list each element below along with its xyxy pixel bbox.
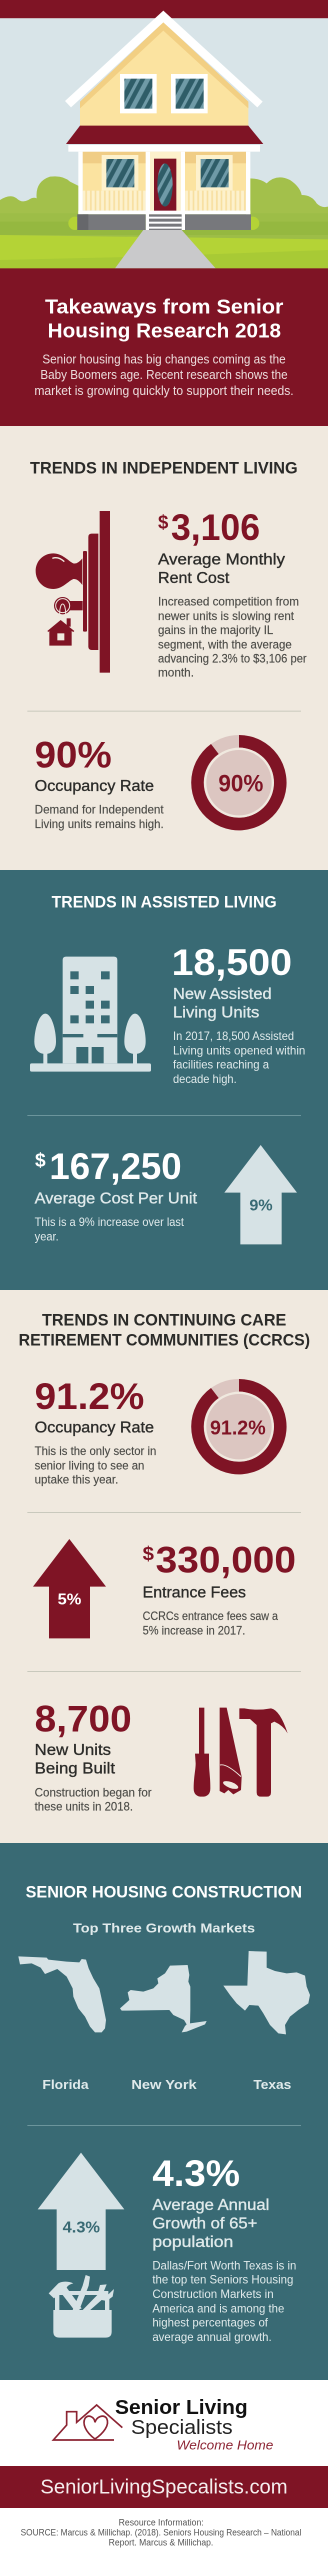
stat: new units being built: 8,700 xyxy=(35,1698,132,1740)
heading: TRENDS IN CONTINUING CARE xyxy=(42,1312,286,1330)
text: growth description: average annual growth. xyxy=(152,2331,272,2344)
text: sources: Resource Information: xyxy=(119,2518,204,2528)
heading: TRENDS IN INDEPENDENT LIVING xyxy=(30,459,298,477)
stat: occupancy: Demand for Independent xyxy=(35,804,164,817)
stat: CCRC occupancy xyxy=(35,1375,156,1486)
heading: TRENDS IN ASSISTED LIVING xyxy=(52,893,277,911)
state labels xyxy=(42,2077,291,2092)
text: sources: Report. Marcus & Millichap. xyxy=(109,2538,213,2548)
arrow: 9% increase: 9% xyxy=(249,1198,273,1215)
panel: trends in continuing care retirement communities xyxy=(0,1290,328,2548)
company name: Senior Living xyxy=(115,2396,248,2419)
text: new units description: Living units opened within xyxy=(173,1044,305,1057)
text: growth description: the top ten Seniors Housing xyxy=(152,2274,293,2287)
stat: rent cost: Rent Cost xyxy=(158,570,230,587)
panel: website banner: SeniorLivingSpecalists.com xyxy=(40,2475,288,2498)
maps: Florida, New York, Texas xyxy=(18,1951,310,2034)
stat: average annual growth: 4.3% xyxy=(152,2152,240,2194)
stat: average annual growth: Average Annual xyxy=(152,2197,269,2214)
stat: cost per unit: $ xyxy=(35,1151,46,1172)
text: sources xyxy=(21,2518,301,2548)
text: new units description: decade high. xyxy=(173,1073,237,1086)
title: Takeaways from Senior xyxy=(45,295,283,318)
stat: entrance fees: 5% increase in 2017. xyxy=(143,1624,245,1637)
panel: senior housing construction xyxy=(0,1843,328,2380)
stat: cost per unit: Average Cost Per Unit xyxy=(35,1191,198,1208)
stat: CCRC occupancy: senior living to see an xyxy=(35,1459,144,1472)
text: rent description: gains in the majority IL xyxy=(158,624,274,637)
title xyxy=(45,295,283,342)
stat: entrance fees xyxy=(143,1539,296,1637)
text: growth description: Dallas/Fort Worth Texas is in xyxy=(152,2259,296,2272)
stat: cost per unit: 167,250 xyxy=(49,1145,182,1187)
stat: new units: 18,500 xyxy=(172,941,292,983)
stat: occupancy: 90% xyxy=(35,733,112,775)
panel: trends in independent living xyxy=(0,426,328,870)
stat: average annual growth: Growth of 65+ xyxy=(152,2215,257,2232)
house xyxy=(65,11,263,230)
stat: new units xyxy=(172,941,292,1022)
stat: CCRC occupancy: This is the only sector in xyxy=(35,1445,156,1458)
chart: 91.2% donut: 91.2% xyxy=(210,1417,266,1439)
stat: cost per unit: This is a 9% increase over last xyxy=(35,1216,185,1229)
hedges xyxy=(0,176,328,220)
panel: website banner xyxy=(0,2466,328,2508)
panel: header illustration xyxy=(0,0,328,268)
text: growth description xyxy=(152,2259,296,2344)
stat: entrance fees: $ xyxy=(143,1544,154,1565)
stat: new units: New Assisted xyxy=(173,986,272,1003)
stat: entrance fees: CCRCs entrance fees saw a xyxy=(143,1610,278,1623)
intro text xyxy=(34,352,294,398)
intro text: Senior housing has big changes coming as the xyxy=(42,352,286,366)
text: rent description: segment, with the average xyxy=(158,638,292,651)
arrow: 4.3% growth: 4.3% xyxy=(63,2220,100,2237)
state labels: Texas xyxy=(253,2077,291,2092)
stat: new units being built: these units in 2018. xyxy=(35,1801,133,1814)
state labels: New York xyxy=(131,2077,197,2092)
text: rent description xyxy=(158,596,307,680)
arrow: 4.3% growth xyxy=(38,2153,124,2270)
icon: apartment building with trees xyxy=(30,957,151,1072)
panel: title block xyxy=(0,268,328,426)
stat: entrance fees: 330,000 xyxy=(156,1539,296,1581)
walkway xyxy=(115,230,216,268)
text: rent description: month. xyxy=(158,667,194,680)
arrow: 5% increase: 5% xyxy=(58,1591,82,1608)
stat: cost per unit xyxy=(35,1145,198,1243)
text: growth description: highest percentages of xyxy=(152,2317,269,2330)
company name: Specialists xyxy=(131,2416,233,2439)
icon: toolbox xyxy=(49,2275,114,2338)
stat: new units being built: Being Built xyxy=(35,1761,116,1778)
heading: RETIREMENT COMMUNITIES (CCRCS) xyxy=(19,1332,310,1350)
text: growth description: America and is among the xyxy=(152,2302,284,2315)
stat: rent cost: Average Monthly xyxy=(158,551,285,568)
text: rent description: newer units is slowing rent xyxy=(158,610,295,623)
arrow: 5% increase xyxy=(33,1539,106,1638)
stat: rent cost: 3,106 xyxy=(171,506,260,548)
text: new units description xyxy=(173,1030,305,1086)
map: Texas xyxy=(223,1951,310,2034)
stat: occupancy xyxy=(35,733,164,831)
stat: cost per unit: year. xyxy=(35,1230,59,1243)
text: new units description: In 2017, 18,500 Assisted xyxy=(173,1030,294,1043)
stat: occupancy: Living units remains high. xyxy=(35,818,164,831)
stat: entrance fees: Entrance Fees xyxy=(143,1584,246,1601)
stat: rent cost: $ xyxy=(158,512,169,533)
lawn xyxy=(0,213,328,268)
text: rent description: Increased competition from xyxy=(158,596,299,609)
stat: CCRC occupancy: Occupancy Rate xyxy=(35,1419,154,1436)
arrow: 9% increase xyxy=(224,1145,297,1244)
stat: CCRC occupancy: 91.2% xyxy=(35,1375,144,1417)
map: New York xyxy=(120,1965,207,2032)
stat: new units being built xyxy=(35,1698,152,1814)
company name: Welcome Home xyxy=(177,2437,273,2452)
panel: logo xyxy=(0,2380,328,2466)
text: new units description: facilities reaching a xyxy=(173,1059,269,1072)
stat: new units being built: New Units xyxy=(35,1742,111,1759)
stat: CCRC occupancy: uptake this year. xyxy=(35,1473,118,1486)
subheading: Top Three Growth Markets xyxy=(73,1920,255,1935)
icon: door knob and house key xyxy=(36,511,110,673)
chart: 90% donut: 90% xyxy=(218,771,263,798)
heading xyxy=(19,1312,310,1350)
intro text: market is growing quickly to support their needs. xyxy=(34,384,294,398)
heading: SENIOR HOUSING CONSTRUCTION xyxy=(26,1884,302,1902)
map: Florida xyxy=(18,1956,106,2032)
text: rent description: advancing 2.3% to $3,106 per xyxy=(158,652,307,665)
stat: average annual growth: population xyxy=(152,2234,233,2251)
stat: rent cost xyxy=(158,506,285,587)
state labels: Florida xyxy=(42,2077,89,2092)
panel: trends in assisted living xyxy=(0,870,328,1290)
text: growth description: Construction Markets in xyxy=(152,2288,274,2301)
icon: screwdriver, saw and hammer xyxy=(194,1708,288,1797)
stat: new units: Living Units xyxy=(173,1005,260,1022)
stat: occupancy: Occupancy Rate xyxy=(35,778,154,795)
intro text: Baby Boomers age. Recent research shows the xyxy=(40,368,288,382)
chart: 91.2% donut xyxy=(191,1379,287,1474)
stat: new units being built: Construction began for xyxy=(35,1786,152,1799)
chart: 90% donut xyxy=(191,735,287,830)
company name xyxy=(115,2396,273,2452)
title: Housing Research 2018 xyxy=(48,319,281,342)
text: sources: SOURCE: Marcus & Millichap. (2018). Seniors Housing Research – National xyxy=(21,2528,301,2538)
icon: house with heart xyxy=(53,2405,122,2440)
stat: average annual growth xyxy=(152,2152,269,2251)
